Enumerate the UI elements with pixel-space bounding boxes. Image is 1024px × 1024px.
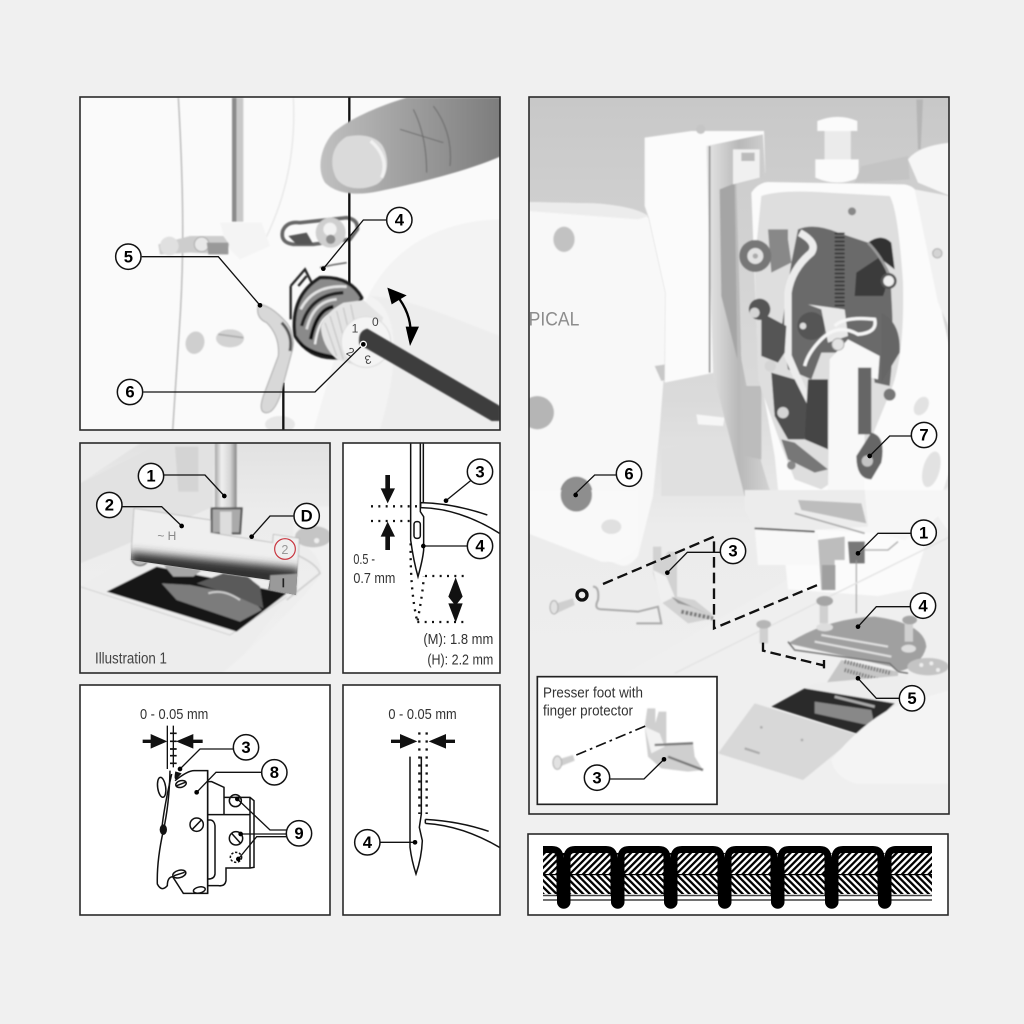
- callout 3: [584, 757, 666, 790]
- callout 4: [856, 593, 936, 629]
- panel: machine head photo: [521, 97, 950, 816]
- arrows: [391, 734, 455, 749]
- needle: [411, 443, 424, 577]
- callout 4: [321, 207, 412, 271]
- callout 1: 1: [919, 523, 928, 542]
- knob scale: 1: [352, 322, 359, 336]
- mechanism: [781, 227, 893, 386]
- bobbin thread: [543, 896, 932, 900]
- needle thread: [543, 850, 932, 896]
- knob scale: 2: [344, 344, 357, 360]
- stitch loops: [557, 893, 892, 909]
- presser foot exploded: [653, 547, 713, 623]
- inset: presser foot with finger protector: finger protector: [543, 703, 633, 720]
- callout 3: [444, 459, 493, 503]
- dotted guides: [419, 732, 427, 814]
- callout 8: [194, 760, 287, 795]
- callout 9: [235, 797, 312, 861]
- inset: presser foot with finger protector: [537, 677, 717, 804]
- icon: finger: [320, 98, 502, 194]
- panel: hook clearance diagram: [80, 685, 330, 915]
- gauge plate: [131, 508, 299, 595]
- machine head: [739, 182, 950, 596]
- machine backdrop and table: [528, 414, 950, 816]
- needle bar block: [828, 339, 880, 493]
- arrow: rotation direction: [387, 288, 419, 346]
- slide opening: [771, 675, 908, 735]
- red circle mark: 2: [281, 543, 288, 557]
- callout 3: [178, 735, 259, 771]
- panel: hook clearance diagram: 0 - 0.05 mm: [140, 706, 208, 723]
- knob scale: 3: [363, 352, 373, 367]
- callout 6: [117, 341, 367, 405]
- callout 5: [116, 244, 262, 308]
- hinged cover: [645, 125, 771, 496]
- icon: screwdriver: [359, 329, 500, 421]
- panel: Illustration 1 gauge photo: ~ H: [157, 529, 176, 543]
- panel: needle rise diagram: (H): 2.2 mm: [427, 651, 493, 668]
- callout 5: 5: [907, 689, 917, 708]
- slide plate: [718, 703, 858, 780]
- panel: needle rise diagram: 0.7 mm: [353, 570, 395, 587]
- wing lever: [258, 304, 293, 413]
- callout 6: 6: [125, 383, 135, 402]
- panel: stitch cross-section: [528, 834, 948, 915]
- needle: [410, 757, 422, 874]
- panel: machine head photo: PICAL: [529, 309, 580, 330]
- callout 1: [138, 463, 227, 498]
- fabric layers: [543, 853, 932, 894]
- callout 7: 7: [919, 426, 929, 445]
- washer: [577, 590, 587, 600]
- inset: presser foot with finger protector: Presser foot with: [543, 684, 643, 701]
- top cap: [815, 99, 950, 196]
- callout 3: 3: [592, 768, 602, 787]
- callout 3: 3: [475, 462, 485, 481]
- callout 4: 4: [363, 833, 373, 852]
- panel: needle rise diagram: (M): 1.8 mm: [423, 631, 493, 648]
- needle bar: [215, 442, 237, 512]
- hook assembly: [156, 771, 254, 894]
- hook: [425, 819, 501, 848]
- callout 6: [573, 461, 642, 497]
- knob scale: 0: [372, 315, 379, 329]
- throat plate: [788, 617, 926, 672]
- callout 9: 9: [294, 824, 304, 843]
- dimension text: 0.5 -: [353, 551, 375, 568]
- thread lines: [283, 96, 349, 431]
- callout 2: [97, 492, 184, 528]
- callout 6: 6: [624, 464, 634, 483]
- plate shadow band: [130, 552, 300, 600]
- knob scale: [344, 315, 379, 367]
- callout 4: 4: [918, 596, 928, 615]
- callout 7: [867, 422, 937, 458]
- hook: [421, 503, 501, 534]
- panel: needle rise diagram: [343, 443, 501, 673]
- panel: needle clearance diagram: 0 - 0.05 mm: [388, 706, 457, 723]
- table edge lines: [675, 537, 950, 673]
- callout 4: 4: [475, 537, 485, 556]
- panel: Illustration 1 gauge photo: Illustration 1: [95, 650, 167, 667]
- arrows: [381, 475, 463, 623]
- callout D: [249, 503, 319, 539]
- callout D: D: [301, 507, 313, 526]
- arrows: [143, 734, 203, 749]
- feed dog: [826, 660, 898, 698]
- callout 3: [665, 538, 746, 575]
- panel: thread tension photo: [80, 96, 502, 433]
- lower machine parts: [528, 478, 950, 783]
- callout 1: [856, 520, 936, 556]
- machine table photo: [81, 444, 330, 636]
- dotted guides: [371, 506, 465, 622]
- needle with guide: [167, 726, 173, 769]
- dashed assembly lines: [603, 537, 825, 668]
- callout 3: 3: [241, 738, 251, 757]
- callout 3: 3: [728, 542, 738, 561]
- callout 4: [355, 830, 417, 855]
- machine body photo: [158, 98, 500, 433]
- tension spring: [291, 263, 362, 358]
- callout 1: 1: [146, 467, 156, 486]
- callout 5: 5: [124, 247, 133, 266]
- callout 8: 8: [270, 763, 279, 782]
- callout 4: 4: [395, 211, 405, 230]
- callout 4: [421, 533, 493, 559]
- panel: needle clearance diagram: [343, 685, 501, 915]
- left machine arm: [521, 202, 691, 566]
- tension knob: [321, 300, 391, 368]
- panel: Illustration 1 gauge photo: [80, 442, 332, 675]
- slot: [107, 567, 287, 632]
- red circle mark: [275, 539, 295, 559]
- callout 5: [856, 676, 925, 711]
- callout 2: 2: [105, 496, 114, 515]
